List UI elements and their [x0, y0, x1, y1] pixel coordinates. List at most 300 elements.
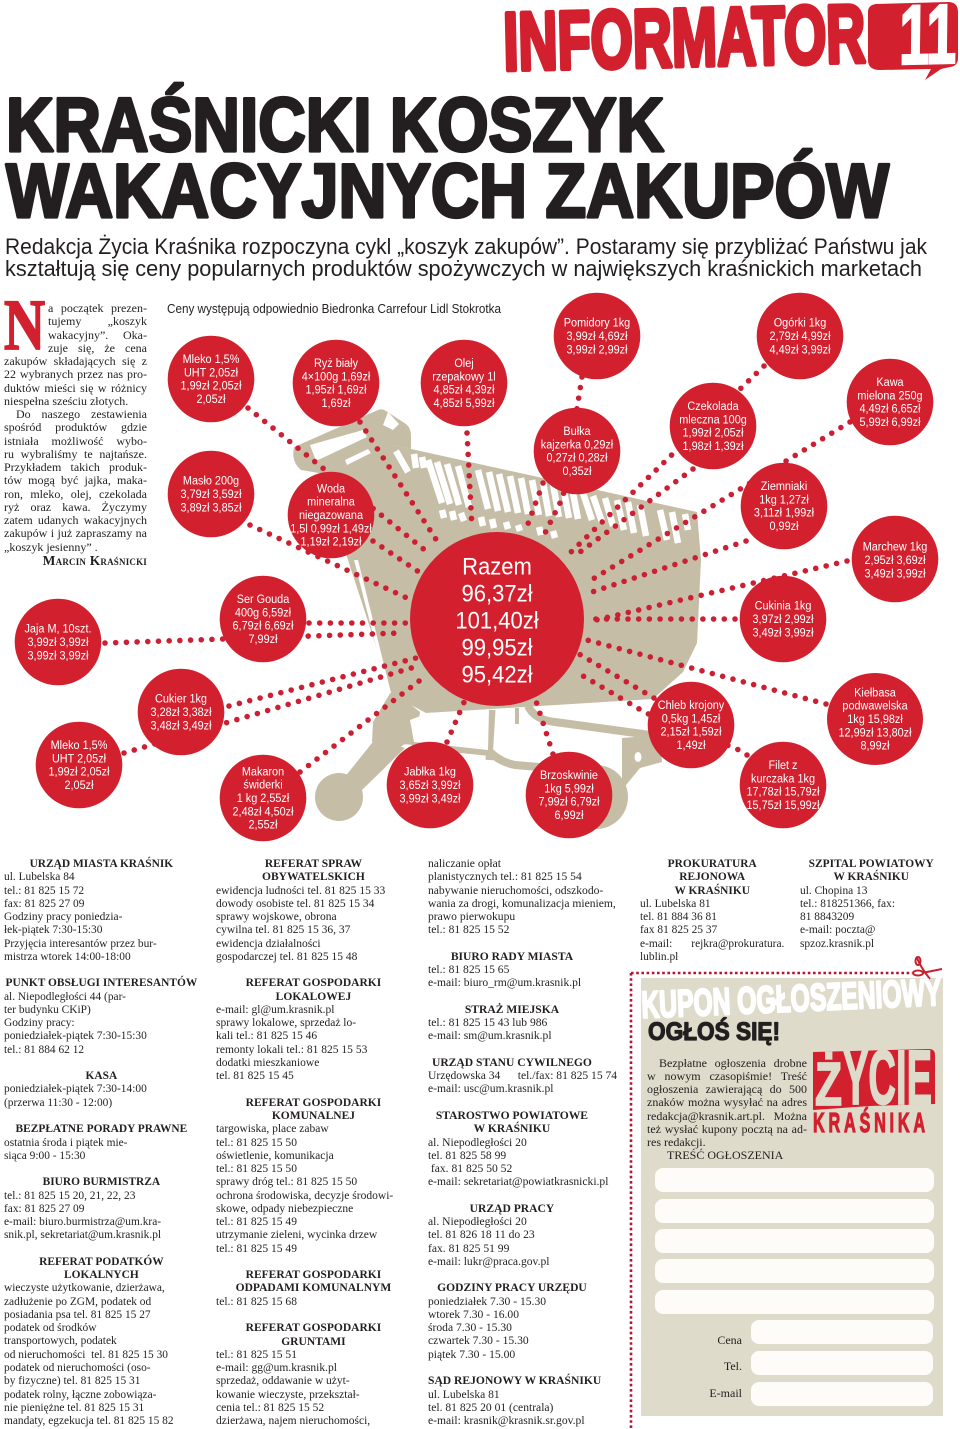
office: Referat Spraw Obywatelskich: sprawy wojskowe, obrona: [216, 909, 337, 923]
office: Referat Gospodarki Gruntami: sprzedaż, oddawanie w użyt-: [216, 1373, 350, 1387]
coupon form fields: [655, 1168, 934, 1406]
office: Referat Podatków: wieczyste użytkowanie, dzierżawa,: [4, 1280, 165, 1294]
price circle: woda: [288, 472, 374, 558]
price circle: woda: mineralna: [307, 496, 355, 509]
directory: Szpital: W KRAŚNIKU: [834, 869, 909, 883]
price circle: mleko top: [168, 336, 254, 422]
office: Godziny pracy urzędu: GODZINY PRACY URZĘDU: [437, 1280, 587, 1294]
directory: Prokuratura: REJONOWA: [679, 869, 745, 883]
directory: Szpital: [800, 856, 934, 950]
office: Godziny pracy urzędu: wtorek 7.30 - 16.00: [428, 1307, 519, 1321]
total circle: [410, 532, 584, 706]
office: Referat Gospodarki Komunalnej: tel.: 81 825 15 50: [216, 1161, 297, 1175]
office: Urząd Miasta: łek-piątek 7:30-15:30: [4, 922, 102, 936]
directory: Szpital: ul. Chopina 13: [800, 883, 867, 897]
directory: Prokuratura: tel. 81 884 36 81: [640, 909, 717, 923]
store order note: Ceny występują odpowiednio Biedronka Carrefour Lidl Stokrotka: [167, 302, 501, 316]
directory: Szpital: e-mail: poczta@: [800, 922, 875, 936]
price circle: olej: [421, 340, 507, 426]
price circle: olej: 4,85zł 5,99zł: [434, 397, 495, 410]
office: Referat Gospodarki Komunalnej: utrzymanie zieleni, wycinka drzew: [216, 1227, 377, 1241]
office: Punkt Obsługi Interesantów: poniedziałek-piątek 7:30-15:30: [4, 1028, 147, 1042]
price circle: ogórki: Ogórki 1kg: [774, 317, 826, 330]
office: Urząd Stanu Cywilnego: Urzędowska 34 tel./fax: 81 825 15 74: [428, 1068, 617, 1082]
price circle: kawa: 4,49zł 6,65zł: [860, 403, 921, 416]
office: Referat Podatków: podatek od nieruchomości (oso-: [4, 1360, 151, 1374]
price circle: brzoskwinie: 6,99zł: [555, 809, 584, 822]
price circle: pomidory: 3,99zł 2,99zł: [567, 344, 628, 356]
price circle: chleb: Chleb krojony: [658, 700, 724, 712]
office: continuation: [428, 856, 616, 936]
article intro beside drop cap: [48, 301, 147, 355]
price circle: mleko bottom: Mleko 1,5%: [51, 740, 107, 752]
office: Godziny pracy urzędu: środa 7.30 - 15.30: [428, 1320, 512, 1334]
article body text: Przykładem takich produk-: [4, 460, 147, 474]
office: Godziny pracy urzędu: piątek 7.30 - 15.00: [428, 1347, 515, 1361]
office: Referat Gospodarki Lokalowej: [216, 975, 381, 1082]
price circle: marchew: Marchew 1kg: [863, 541, 927, 554]
price circle: cukinia: 3,97zł 2,99zł: [753, 614, 814, 626]
logo: Życie Kraśnika: [813, 1035, 935, 1138]
office: Porady prawne: ostatnia środa i piątek mie-: [4, 1135, 127, 1149]
office: Referat Podatków: od nieruchomości tel. 81 825 15 30: [4, 1347, 168, 1361]
office: Urząd Miasta: [4, 856, 174, 963]
price circle: pomidory: [554, 293, 640, 379]
price circle: kiełbasa: 1kg 15,98zł: [847, 714, 903, 726]
office: Referat Gospodarki Komunalnej: KOMUNALNEJ: [272, 1108, 355, 1122]
office: Sąd Rejonowy: SĄD REJONOWY W KRAŚNIKU: [428, 1373, 601, 1387]
office: Referat Podatków: mandaty, egzekucja tel. 81 825 15 82: [4, 1413, 174, 1427]
office: Referat Gospodarki Komunalnej: tel.: 81 825 15 49: [216, 1241, 297, 1255]
office: Punkt Obsługi Interesantów: tel.: 81 884 62 12: [4, 1042, 84, 1056]
article intro beside drop cap: zuje się, że cena: [48, 341, 147, 355]
price circle: ser gouda: 400g 6,59zł: [235, 607, 292, 619]
price circle: ogórki: 4,49zł 3,99zł: [770, 344, 831, 356]
office: Godziny pracy urzędu: poniedziałek 7.30 - 15.30: [428, 1294, 546, 1308]
office: Referat Podatków: zadłużenie po ZGM, podatek od: [4, 1294, 151, 1308]
price circle: masło: 3,79zł 3,59zł: [181, 489, 242, 501]
price circle: mleko bottom: 1,99zł 2,05zł: [49, 766, 110, 779]
office: Straż Miejska: tel.: 81 825 15 43 lub 986: [428, 1015, 547, 1029]
price circle: makaron: 2,48zł 4,50zł: [233, 806, 294, 818]
office: Starostwo Powiatowe: al. Niepodległości 20: [428, 1135, 527, 1149]
logo: Życie Kraśnika: KRAŚNIKA: [813, 1106, 929, 1138]
price circle: cukier: 3,28zł 3,38zł: [151, 707, 212, 719]
price circle: filet: 15,75zł 15,99zł: [746, 799, 820, 812]
price circle: filet: 17,78zł 15,79zł: [746, 786, 820, 799]
office: Urząd Miasta: Przyjęcia interesantów przez bur-: [4, 936, 157, 950]
price circle: kiełbasa: 12,99zł 13,80zł: [838, 727, 912, 739]
form label: tel: Tel.: [724, 1359, 742, 1373]
icon: scissors: [913, 957, 942, 979]
office: Urząd Stanu Cywilnego: [428, 1055, 617, 1095]
office: Referat Gospodarki Gruntami: [216, 1320, 381, 1427]
price circle: brzoskwinie: 1kg 5,99zł: [544, 783, 594, 795]
total circle: 101,40zł: [455, 606, 539, 634]
price circle: kiełbasa: [827, 673, 923, 765]
office: Straż Miejska: [428, 1002, 559, 1042]
office: Referat Gospodarki Komunalnej: REFERAT GOSPODARKI: [246, 1095, 381, 1109]
office: Referat Gospodarki Gruntami: GRUNTAMI: [281, 1334, 346, 1348]
subtitle: Redakcja Życia Kraśnika rozpoczyna cykl „koszyk zakupów”. Postaramy się przybliżać Państwu jak: [5, 234, 928, 259]
office: Biuro Burmistrza: snik.pl, sekretariat@um.krasnik.pl: [4, 1227, 161, 1241]
directory: Prokuratura: e-mail: rejkra@prokuratura.: [640, 936, 784, 950]
office: Kasa: (przerwa 11:30 - 12:00): [4, 1095, 112, 1109]
office: Starostwo Powiatowe: [428, 1108, 608, 1188]
price circle: ryż: 1,95zł 1,69zł: [306, 384, 367, 397]
price circle: czekolada: 1,98zł 1,39zł: [683, 440, 744, 453]
article body text: zatem udanych wakacyjnych: [4, 513, 147, 527]
price circle: masło: [168, 451, 254, 537]
price circle: czekolada: 1,99zł 2,05zł: [683, 427, 744, 440]
coupon description: redakcja@krasnik.art.pl. Można: [647, 1109, 807, 1123]
price circle: chleb: 0,5kg 1,45zł: [662, 713, 721, 725]
office: Referat Spraw Obywatelskich: [216, 856, 385, 963]
price circle: filet: [740, 742, 826, 828]
office: Urząd Miasta: mistrza wtorek 14:00-18:00: [4, 949, 131, 963]
office: Starostwo Powiatowe: fax. 81 825 50 52: [431, 1161, 512, 1175]
price circle: kawa: 5,99zł 6,99zł: [860, 416, 921, 429]
directory: Szpital: tel.: 818251366, fax:: [800, 896, 895, 910]
article body text: niespełna sześciu złotych.: [4, 394, 128, 408]
office: Punkt Obsługi Interesantów: Godziny pracy:: [4, 1015, 75, 1029]
office: continuation: planistycznych tel.: 81 825 15 54: [428, 869, 582, 883]
shopping cart illustration: [293, 409, 701, 829]
office: continuation: tel.: 81 825 15 52: [428, 922, 509, 936]
office: Sąd Rejonowy: ul. Lubelska 81: [428, 1387, 500, 1401]
total circle: 96,37zł: [461, 579, 533, 607]
price circle: jaja: [15, 599, 101, 685]
office: Porady prawne: siąca 9:00 - 15:30: [4, 1148, 85, 1162]
office: Biuro Rady Miasta: BIURO RADY MIASTA: [451, 949, 573, 963]
article body text: zakupów składających się z: [4, 354, 147, 368]
article body text: 22 wybranych przez nas pro-: [4, 367, 147, 381]
office: Urząd Pracy: tel. 81 826 18 11 do 23: [428, 1227, 535, 1241]
office: Biuro Rady Miasta: tel.: 81 825 15 65: [428, 962, 509, 976]
office: Referat Gospodarki Gruntami: dzierżawa, najem nieruchomości,: [216, 1413, 370, 1427]
price circle: woda: 1,5l 0,99zł 1,49zł: [290, 523, 372, 535]
office: Starostwo Powiatowe: W KRAŚNIKU: [474, 1121, 550, 1135]
office: Kasa: poniedziałek-piątek 7:30-14:00: [4, 1081, 147, 1095]
directory: Prokuratura: PROKURATURA: [668, 856, 757, 870]
office: Referat Podatków: podatek od środków: [4, 1320, 96, 1334]
office: Godziny pracy urzędu: [428, 1280, 587, 1361]
office: Referat Gospodarki Komunalnej: sprawy dróg tel.: 81 825 15 50: [216, 1174, 357, 1188]
form label: e-mail: E-mail: [709, 1386, 742, 1400]
office: Porady prawne: [4, 1121, 187, 1162]
article body text: ru wybraliśmy te najtańsze.: [4, 447, 147, 461]
office: Urząd Miasta: Godziny pracy poniedzia-: [4, 909, 122, 923]
article body text: Do naszego zestawienia: [16, 407, 147, 421]
price circle: kiełbasa: Kiełbasa: [854, 687, 896, 700]
price circle: mleko top: Mleko 1,5%: [183, 354, 239, 366]
article body text: tów mogą być jajka, maka-: [4, 473, 147, 487]
price circle: bułka: [534, 408, 620, 494]
office: continuation: nabywanie nieruchomości, odszkodo-: [428, 883, 603, 897]
subtitle: [5, 234, 928, 281]
article body text: „koszyk jesienny” .: [4, 540, 98, 554]
office: Biuro Rady Miasta: e-mail: biuro_rm@um.krasnik.pl: [428, 975, 581, 989]
price circle: chleb: 1,49zł: [677, 739, 706, 752]
price circle: masło: 3,89zł 3,85zł: [181, 502, 242, 514]
price circle: mleko top: 2,05zł: [197, 393, 226, 406]
office: Referat Spraw Obywatelskich: cywilna tel. 81 825 15 36, 37: [216, 922, 350, 936]
article body text: duktów mieści się w różnicy: [4, 381, 147, 395]
office: Urząd Pracy: [428, 1201, 554, 1268]
office: Referat Spraw Obywatelskich: dowody osobiste tel. 81 825 15 34: [216, 896, 374, 910]
article intro beside drop cap: wakacyjny”. Oka-: [48, 328, 147, 342]
subtitle: kształtują się ceny popularnych produktów spożywczych w największych kraśnickich marketach: [5, 256, 922, 281]
office: Punkt Obsługi Interesantów: al. Niepodległości 44 (par-: [4, 989, 126, 1003]
office: continuation: wania za drogi, komunalizacja mieniem,: [428, 896, 616, 910]
office: Biuro Burmistrza: BIURO BURMISTRZA: [43, 1174, 160, 1188]
directory: Szpital: spzoz.krasnik.pl: [800, 936, 874, 950]
price circle: pomidory: 3,99zł 4,69zł: [567, 331, 628, 343]
office: Referat Gospodarki Komunalnej: ochrona środowiska, decyzje środowi-: [216, 1188, 393, 1202]
article intro beside drop cap: tujemy „koszyk: [48, 314, 147, 328]
price circle: woda: 1,19zł 2,19zł: [301, 536, 362, 549]
price circle: czekolada: Czekolada: [687, 401, 739, 413]
price circle: jaja: Jaja M, 10szt.: [24, 623, 92, 636]
price circle: marchew: [852, 516, 938, 602]
article body text: [4, 354, 147, 568]
price circle: makaron: 1 kg 2,55zł: [237, 793, 290, 805]
office: Referat Podatków: LOKALNYCH: [64, 1267, 139, 1281]
directory column 2: [216, 856, 393, 1427]
price circle: kawa: [847, 359, 933, 445]
coupon dotted cut line: [631, 973, 912, 1429]
coupon description: res redakcji.: [647, 1135, 706, 1149]
office: Starostwo Powiatowe: tel. 81 825 58 99: [428, 1148, 506, 1162]
article intro beside drop cap: a początek prezen-: [48, 301, 147, 315]
price circle: ser gouda: 7,99zł: [249, 633, 278, 646]
office: Urząd Miasta: ul. Lubelska 84: [4, 869, 75, 883]
office: Urząd Stanu Cywilnego: e-mail: usc@um.krasnik.pl: [428, 1081, 553, 1095]
office: Biuro Burmistrza: [4, 1174, 161, 1241]
price circle: cukier: 3,48zł 3,49zł: [151, 720, 212, 732]
price circle: ogórki: 2,79zł 4,99zł: [770, 331, 831, 343]
office: Kasa: [4, 1068, 147, 1109]
price circle: bułka: 0,27zł 0,28zł: [547, 452, 608, 465]
office: Starostwo Powiatowe: e-mail: sekretariat@powiatkrasnicki.pl: [428, 1174, 608, 1188]
office: Referat Spraw Obywatelskich: gospodarczej tel. 81 825 15 48: [216, 949, 357, 963]
price circle: olej: Olej: [454, 358, 474, 370]
price circle: cukinia: [740, 576, 826, 662]
office: Referat Gospodarki Gruntami: REFERAT GOSPODARKI: [246, 1320, 381, 1334]
office: Referat Podatków: [4, 1254, 174, 1427]
office: Punkt Obsługi Interesantów: PUNKT OBSŁUGI INTERESANTÓW: [5, 975, 197, 989]
office: Referat Gospodarki Lokalowej: e-mail: gl@um.krasnik.pl: [216, 1002, 334, 1016]
article body text: ryż oraz kawa. Życzymy: [4, 500, 147, 514]
office: Referat Podatków: posiadania psa tel. 81 825 15 27: [4, 1307, 151, 1321]
office: Kasa: KASA: [86, 1068, 117, 1082]
office: Urząd Miasta: tel.: 81 825 15 72: [4, 883, 84, 897]
price circle: brzoskwinie: 7,99zł 6,79zł: [539, 796, 600, 809]
coupon description: znaków można wysyłać na adres: [647, 1095, 807, 1109]
office: Referat Spraw Obywatelskich: ewidencja działalności: [216, 936, 321, 950]
coupon heading: OGŁOŚ SIĘ!: [648, 1016, 780, 1046]
price circle: brzoskwinie: Brzoskwinie: [540, 770, 598, 782]
directory: Prokuratura: ul. Lubelska 81: [640, 896, 711, 910]
price circle: jabłka: 3,99zł 3,49zł: [400, 793, 461, 805]
coupon description: ogłoszenia zawierającą do 500: [647, 1082, 807, 1096]
price circle: woda: niegazowana: [299, 510, 364, 522]
office: Urząd Stanu Cywilnego: URZĄD STANU CYWILNEGO: [432, 1055, 592, 1069]
price circle: cukinia: Cukinia 1kg: [755, 600, 811, 613]
price circle: bułka: Bułka: [563, 426, 591, 438]
article body text: istniała możliwość wybo-: [4, 434, 147, 448]
price circle: ryż: [293, 340, 379, 426]
office: Referat Spraw Obywatelskich: OBYWATELSKICH: [262, 869, 365, 883]
office: Biuro Rady Miasta: [428, 949, 581, 989]
price circle: bułka: kajzerka 0,29zł: [541, 439, 614, 451]
price circle: marchew: 3,49zł 3,99zł: [865, 568, 926, 580]
coupon description: w nowym czasopiśmie! Treść: [647, 1069, 807, 1083]
price circle: ziemniaki: 1kg 1,27zł: [759, 494, 809, 506]
total circle: Razem: [462, 552, 532, 580]
directory: Szpital: 81 8843209: [800, 909, 854, 923]
directory: Prokuratura: fax 81 825 25 37 lublin.pl: [640, 922, 717, 963]
price circle: ser gouda: [220, 576, 306, 662]
office: Referat Gospodarki Lokalowej: dodatki mieszkaniowe: [216, 1055, 319, 1069]
price circle: kiełbasa: 8,99zł: [861, 740, 890, 753]
office: Sąd Rejonowy: [428, 1373, 601, 1427]
price circle: ryż: 4×100g 1,69zł: [302, 371, 371, 383]
price circle: jaja: 3,99zł 3,99zł: [28, 637, 89, 649]
price circle: jaja: 3,99zł 3,99zł: [28, 650, 89, 662]
office: Straż Miejska: STRAŻ MIEJSKA: [465, 1002, 559, 1016]
total circle: 95,42zł: [461, 660, 533, 688]
directory: Szpital: SZPITAL POWIATOWY: [809, 856, 934, 870]
office: Referat Gospodarki Lokalowej: kali tel.: 81 825 15 46: [216, 1028, 317, 1042]
price circle: mleko top: 1,99zł 2,05zł: [181, 380, 242, 393]
office: Biuro Burmistrza: tel.: 81 825 15 20, 21, 22, 23: [4, 1188, 135, 1202]
price circle: ziemniaki: 0,99zł: [770, 520, 799, 533]
office: Referat Gospodarki Gruntami: kowanie wieczyste, przekształ-: [216, 1387, 360, 1401]
price circle: filet: kurczaka 1kg: [751, 773, 815, 785]
office: Referat Gospodarki Lokalowej: remonty lokali tel.: 81 825 15 53: [216, 1042, 367, 1056]
article body text: spośród produktów gdzie: [4, 420, 147, 434]
coupon description: też wysłać kupony pocztą na ad-: [647, 1122, 807, 1136]
price circle: czekolada: mleczna 100g: [679, 414, 747, 426]
office: Referat Gospodarki Lokalowej: sprawy lokalowe, sprzedaż lo-: [216, 1015, 356, 1029]
directory: Prokuratura: W KRAŚNIKU: [674, 883, 750, 897]
price circle: mleko top: UHT 2,05zł: [184, 367, 238, 379]
price circle: makaron: świderki: [243, 779, 283, 792]
price circle: ser gouda: Ser Gouda: [237, 594, 289, 606]
coupon description: [647, 1056, 807, 1149]
price circle: cukier: [138, 669, 224, 755]
title: KRAŚNICKI KOSZYK: [6, 83, 664, 168]
office: Biuro Burmistrza: fax: 81 825 27 09: [4, 1201, 84, 1215]
price circle: bułka: 0,35zł: [563, 465, 592, 478]
office: Referat Podatków: transportowych, podatek: [4, 1333, 117, 1347]
price circle: woda: Woda: [317, 483, 345, 496]
price circle: mleko bottom: [36, 722, 122, 808]
article body text: ron, mleko, olej, czekolada: [4, 487, 147, 501]
office: Sąd Rejonowy: tel. 81 825 20 01 (centrala): [428, 1400, 553, 1414]
office: Referat Podatków: podatek rolny, łączne zobowiąza-: [4, 1387, 156, 1401]
coupon description: Bezpłatne ogłoszenia drobne: [659, 1056, 807, 1070]
office: Godziny pracy urzędu: czwartek 7.30 - 15.30: [428, 1333, 529, 1347]
price circle: olej: rzepakowy 1l: [432, 371, 496, 383]
office: Referat Spraw Obywatelskich: REFERAT SPRAW: [265, 856, 362, 870]
price circle: jabłka: 3,65zł 3,99zł: [400, 780, 461, 792]
office: Referat Gospodarki Gruntami: tel.: 81 825 15 51: [216, 1347, 297, 1361]
directory column 3: [428, 856, 617, 1427]
office: Referat Podatków: by fizyczne) tel. 81 825 15 31: [4, 1373, 140, 1387]
price circle: cukinia: 3,49zł 3,99zł: [753, 627, 814, 639]
dotted connector lines: [105, 366, 850, 772]
directory: Prokuratura: [640, 856, 784, 963]
office: Referat Gospodarki Komunalnej: skowe, odpady niebezpieczne: [216, 1201, 353, 1215]
coupon panel background: [641, 978, 943, 1416]
office: Referat Gospodarki Lokalowej: LOKALOWEJ: [276, 989, 351, 1003]
coupon label: treść ogłoszenia: TREŚĆ OGŁOSZENIA: [667, 1148, 783, 1162]
price circle: cukier: Cukier 1kg: [155, 693, 207, 706]
office: Referat Gospodarki Komunalnej: tel.: 81 825 15 49: [216, 1214, 297, 1228]
office: Urząd Pracy: al. Niepodłegłości 20: [428, 1214, 527, 1228]
price circle: ryż: Ryż biały: [314, 358, 358, 370]
price circle: ogórki: [757, 293, 843, 379]
price circle: kawa: mielona 250g: [857, 390, 923, 402]
office: Referat Gospodarki Odpadami: [216, 1267, 391, 1308]
office: Urząd Pracy: e-mail: lukr@praca.gov.pl: [428, 1254, 549, 1268]
price circle: czekolada: [670, 383, 756, 469]
price circle: jabłka: Jabłka 1kg: [404, 766, 456, 779]
price circle: mleko bottom: UHT 2,05zł: [52, 753, 106, 765]
office: Straż Miejska: e-mail: sm@um.krasnik.pl: [428, 1028, 552, 1042]
office: Referat Gospodarki Lokalowej: tel. 81 825 15 45: [216, 1068, 294, 1082]
office: Referat Gospodarki Odpadami: tel.: 81 825 15 68: [216, 1294, 297, 1308]
office: Referat Gospodarki Odpadami: ODPADAMI KOMUNALNYM: [236, 1280, 391, 1294]
office: Punkt Obsługi Interesantów: [4, 975, 198, 1056]
form label: cena: Cena: [717, 1333, 742, 1347]
total circle: 99,95zł: [461, 633, 533, 661]
office: Referat Gospodarki Komunalnej: oświetlenie, komunikacja: [216, 1148, 334, 1162]
office: Referat Podatków: nie pieniężne tel. 81 825 15 31: [4, 1400, 144, 1414]
office: Porady prawne: BEZPŁATNE PORADY PRAWNE: [16, 1121, 187, 1135]
office: Starostwo Powiatowe: STAROSTWO POWIATOWE: [436, 1108, 588, 1122]
office: Urząd Miasta: fax: 81 825 27 09: [4, 896, 84, 910]
office: Referat Gospodarki Gruntami: e-mail: gg@um.krasnik.pl: [216, 1360, 337, 1374]
article body text: Marcin Kraśnicki: [43, 553, 147, 568]
price circle: masło: Masło 200g: [183, 475, 239, 488]
price circle: pomidory: Pomidory 1kg: [564, 317, 630, 330]
price circle: makaron: [220, 755, 306, 841]
price circle: kiełbasa: podwawelska: [842, 700, 908, 713]
price circle: chleb: 2,15zł 1,59zł: [661, 726, 722, 739]
price circle: jabłka: [387, 742, 473, 828]
logo: Życie Kraśnika: Ż: [815, 1050, 842, 1118]
office: Referat Gospodarki Komunalnej: tel.: 81 825 15 50: [216, 1135, 297, 1149]
office: continuation: naliczanie opłat: [428, 856, 501, 870]
office: Punkt Obsługi Interesantów: ter budynku CKiP): [4, 1002, 91, 1016]
office: Referat Gospodarki Lokalowej: REFERAT GOSPODARKI: [246, 975, 381, 989]
price circle: kawa: Kawa: [876, 377, 904, 389]
office: continuation: prawo pierwokupu: [428, 909, 515, 923]
office: Referat Podatków: REFERAT PODATKÓW: [39, 1254, 164, 1268]
office: Urząd Miasta: URZĄD MIASTA KRAŚNIK: [30, 856, 173, 870]
price circle: mleko bottom: 2,05zł: [65, 779, 94, 792]
price circle: ziemniaki: [741, 463, 827, 549]
office: Referat Gospodarki Odpadami: REFERAT GOSPODARKI: [246, 1267, 381, 1281]
title: [6, 83, 889, 234]
price circle: ser gouda: 6,79zł 6,69zł: [233, 620, 294, 633]
office: Sąd Rejonowy: e-mail: krasnik@krasnik.sr.gov.pl: [428, 1413, 585, 1427]
office: Urząd Pracy: fax. 81 825 51 99: [428, 1241, 509, 1255]
price circle: ziemniaki: Ziemniaki: [761, 481, 807, 493]
